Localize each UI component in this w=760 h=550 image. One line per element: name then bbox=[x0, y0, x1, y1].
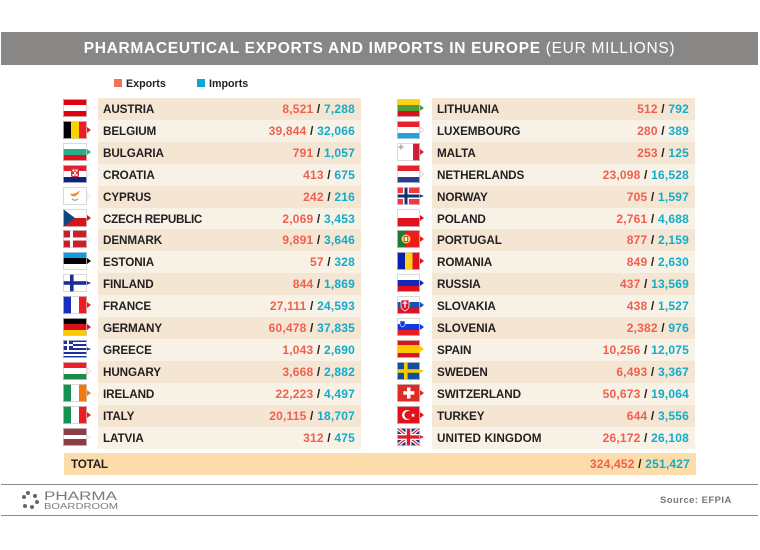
row: Latvia: LATVIA bbox=[103, 432, 144, 444]
row: Switzerland bbox=[397, 383, 695, 405]
legend: Exports bbox=[126, 78, 166, 90]
flag: United Kingdom bbox=[397, 428, 424, 446]
row: Greece: GREECE bbox=[103, 344, 152, 357]
row: France: 27,111 / 24,593 bbox=[270, 299, 355, 313]
row: Slovakia: 438 / 1,527 bbox=[627, 299, 689, 313]
title banner: PHARMACEUTICAL EXPORTS AND IMPORTS IN EUROPE (EUR MILLIONS) bbox=[84, 40, 675, 57]
flag: Luxembourg bbox=[397, 121, 424, 139]
flag: Ireland bbox=[63, 384, 91, 402]
logo: Pharma Boardroom: BOARDROOM bbox=[44, 501, 118, 511]
row: Sweden: 6,493 / 3,367 bbox=[616, 365, 689, 379]
row: Czech Republic: 2,069 / 3,453 bbox=[282, 212, 355, 226]
flag: Cyprus bbox=[70, 190, 91, 201]
row: Netherlands: 23,098 / 16,528 bbox=[603, 168, 689, 182]
row: Greece: 1,043 / 2,690 bbox=[282, 343, 355, 357]
row: Sweden bbox=[397, 361, 695, 383]
flag: Estonia bbox=[63, 252, 91, 264]
row: Lithuania: LITHUANIA bbox=[437, 103, 499, 116]
row: Slovenia: 2,382 / 976 bbox=[627, 321, 689, 335]
row: Finland: FINLAND bbox=[103, 278, 154, 291]
row: Ireland: 22,223 / 4,497 bbox=[275, 387, 355, 401]
row: Austria: 8,521 / 7,288 bbox=[282, 102, 355, 116]
row: Slovakia bbox=[397, 295, 695, 317]
row: France bbox=[63, 295, 361, 317]
row: Malta: 253 / 125 bbox=[637, 146, 689, 160]
row: Germany: GERMANY bbox=[103, 322, 162, 335]
row: United Kingdom bbox=[397, 426, 695, 448]
row: Netherlands bbox=[397, 164, 695, 186]
flag: Latvia bbox=[63, 428, 91, 446]
row: Germany bbox=[63, 317, 361, 339]
row: Finland bbox=[63, 273, 361, 295]
flag: Russia bbox=[397, 280, 424, 292]
logo: Pharma Boardroom bbox=[22, 491, 118, 511]
row: Romania: 849 / 2,630 bbox=[627, 255, 689, 269]
row: Bulgaria: 791 / 1,057 bbox=[293, 146, 355, 160]
row: Czech Republic bbox=[63, 208, 361, 230]
flag: Spain bbox=[397, 340, 424, 358]
row: Estonia bbox=[63, 251, 361, 273]
row: Spain: 10,256 / 12,075 bbox=[603, 343, 689, 357]
row: Russia bbox=[397, 273, 695, 295]
row: Lithuania bbox=[397, 98, 695, 120]
row: Croatia: CROATIA bbox=[103, 169, 155, 182]
row: United Kingdom: 26,172 / 26,108 bbox=[603, 430, 689, 444]
flag: Turkey bbox=[397, 406, 424, 424]
flag: Slovakia bbox=[397, 300, 424, 314]
row: Netherlands: NETHERLANDS bbox=[437, 169, 524, 182]
row: Spain bbox=[397, 339, 695, 361]
flag: Italy bbox=[63, 406, 91, 424]
flag: Switzerland bbox=[397, 384, 424, 402]
row: Norway: 705 / 1,597 bbox=[627, 190, 689, 204]
flag: Belgium bbox=[63, 121, 91, 139]
row: Latvia bbox=[63, 426, 361, 448]
row: Hungary: HUNGARY bbox=[103, 366, 161, 379]
row: Slovenia bbox=[397, 317, 695, 339]
row: Russia: 437 / 13,569 bbox=[620, 277, 689, 291]
row: Cyprus: CYPRUS bbox=[103, 191, 151, 204]
row: Portugal: PORTUGAL bbox=[437, 234, 502, 247]
title banner bbox=[1, 32, 758, 65]
row: Poland: 2,761 / 4,688 bbox=[616, 212, 689, 226]
row: Slovenia: SLOVENIA bbox=[437, 322, 496, 335]
flag: Poland bbox=[397, 215, 424, 227]
row: Malta bbox=[397, 142, 695, 164]
row: Austria bbox=[63, 98, 361, 120]
row: Italy bbox=[63, 405, 361, 427]
row: United Kingdom: UNITED KINGDOM bbox=[437, 432, 542, 444]
flag: Hungary bbox=[63, 362, 91, 380]
flag: Malta bbox=[398, 143, 424, 161]
row: Ireland bbox=[63, 383, 361, 405]
row: Slovakia: SLOVAKIA bbox=[437, 300, 496, 313]
total row bbox=[64, 453, 696, 475]
flag: Croatia bbox=[63, 165, 91, 183]
row: Denmark: 9,891 / 3,646 bbox=[282, 233, 355, 247]
row: Belgium: BELGIUM bbox=[103, 125, 156, 138]
flag: France bbox=[63, 296, 91, 314]
source: Source: EFPIA bbox=[660, 495, 732, 506]
row: Estonia: ESTONIA bbox=[103, 256, 154, 269]
flag: Romania bbox=[397, 252, 424, 270]
row: Turkey bbox=[397, 405, 695, 427]
row: Lithuania: 512 / 792 bbox=[637, 102, 689, 116]
row: Bulgaria: BULGARIA bbox=[103, 147, 164, 160]
row: Poland: POLAND bbox=[437, 212, 486, 226]
row: Hungary bbox=[63, 361, 361, 383]
flag: Lithuania bbox=[397, 99, 424, 117]
row: Turkey: TURKEY bbox=[437, 410, 484, 423]
flag: Austria bbox=[63, 99, 91, 117]
row: Luxembourg: 280 / 389 bbox=[637, 124, 689, 138]
flag: Sweden bbox=[397, 362, 424, 380]
flag: Germany bbox=[63, 318, 91, 336]
total row: 324,452 / 251,427 bbox=[590, 457, 690, 471]
row: Italy: 20,115 / 18,707 bbox=[269, 409, 355, 423]
row: Latvia: 312 / 475 bbox=[303, 430, 355, 444]
flag: Greece bbox=[63, 340, 91, 358]
row: Portugal: 877 / 2,159 bbox=[627, 233, 689, 247]
flag: Bulgaria bbox=[63, 149, 91, 161]
flag: Finland bbox=[63, 274, 91, 292]
row: Cyprus bbox=[63, 186, 361, 208]
legend bbox=[114, 78, 248, 90]
row: Croatia: 413 / 675 bbox=[303, 168, 355, 182]
row: France: FRANCE bbox=[103, 300, 151, 313]
flag: Czech Republic bbox=[63, 209, 91, 227]
row: Italy: ITALY bbox=[103, 410, 134, 423]
flag: Slovenia bbox=[397, 321, 424, 336]
row: Denmark bbox=[63, 229, 361, 251]
row: Russia: RUSSIA bbox=[437, 278, 481, 291]
legend: Imports bbox=[209, 78, 248, 90]
row: Hungary: 3,668 / 2,882 bbox=[282, 365, 355, 379]
logo: Pharma Boardroom: PHARMA bbox=[44, 491, 117, 503]
row: Germany: 60,478 / 37,835 bbox=[269, 321, 355, 335]
row: Cyprus: 242 / 216 bbox=[303, 190, 355, 204]
row: Belgium: 39,844 / 32,066 bbox=[269, 124, 355, 138]
row: Sweden: SWEDEN bbox=[437, 366, 488, 379]
row: Switzerland: SWITZERLAND bbox=[437, 388, 521, 401]
row: Belgium bbox=[63, 120, 361, 142]
flag: Norway bbox=[397, 187, 424, 205]
flag: Portugal bbox=[397, 230, 424, 248]
row: Czech Republic: CZECH REPUBLIC bbox=[103, 212, 202, 226]
row: Poland bbox=[397, 208, 695, 230]
row: Luxembourg bbox=[397, 120, 695, 142]
row: Malta: MALTA bbox=[437, 147, 476, 160]
row: Bulgaria bbox=[63, 142, 361, 164]
row: Portugal bbox=[397, 229, 695, 251]
row: Romania: ROMANIA bbox=[437, 256, 492, 269]
row: Greece bbox=[63, 339, 361, 361]
row: Norway bbox=[397, 186, 695, 208]
row: Denmark: DENMARK bbox=[103, 234, 162, 247]
row: Turkey: 644 / 3,556 bbox=[627, 409, 689, 423]
row: Norway: NORWAY bbox=[437, 191, 488, 204]
row: Romania bbox=[397, 251, 695, 273]
row: Ireland: IRELAND bbox=[103, 388, 154, 401]
row: Croatia bbox=[63, 164, 361, 186]
row: Finland: 844 / 1,869 bbox=[293, 277, 355, 291]
row: Spain: SPAIN bbox=[437, 344, 471, 357]
row: Luxembourg: LUXEMBOURG bbox=[437, 125, 520, 138]
flag: Denmark bbox=[63, 230, 91, 248]
row: Switzerland: 50,673 / 19,064 bbox=[603, 387, 689, 401]
row: Estonia: 57 / 328 bbox=[310, 255, 355, 269]
flag: Netherlands bbox=[397, 165, 424, 183]
row: Austria: AUSTRIA bbox=[103, 103, 154, 116]
total row: TOTAL bbox=[71, 458, 108, 471]
